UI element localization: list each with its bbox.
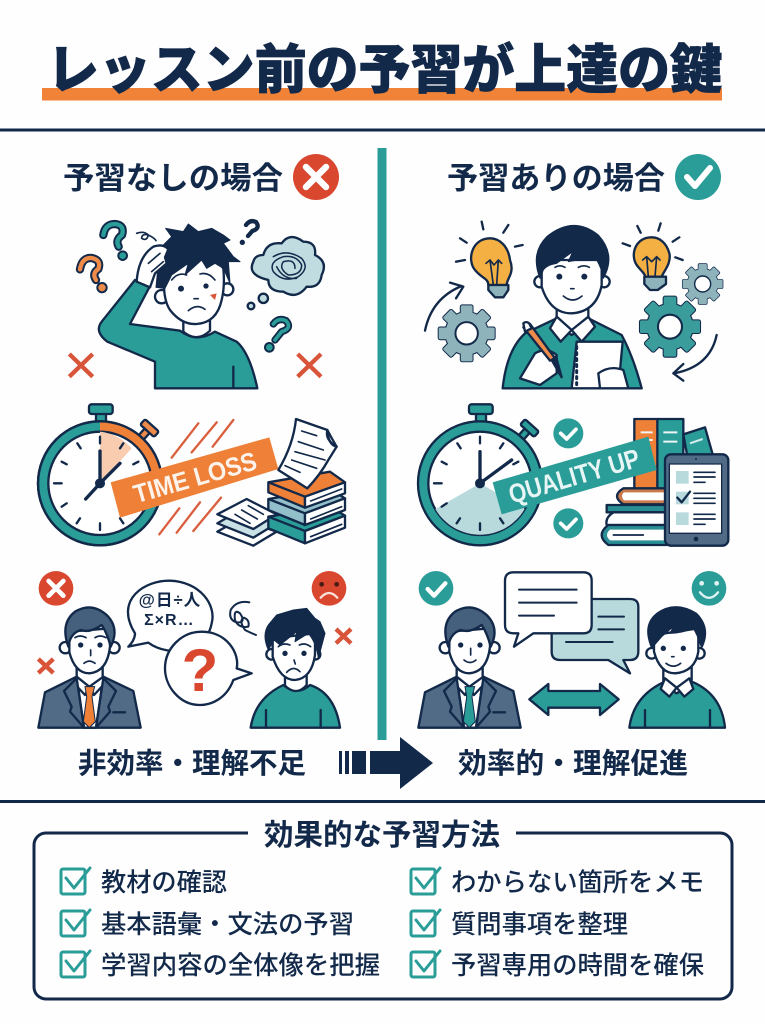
title: レッスン前の予習が上達の鍵: [47, 40, 722, 100]
checklist right column: 予習専用の時間を確保: [451, 952, 705, 980]
illustration: quality up stopwatch: [418, 404, 728, 546]
icon: small crosses: [38, 629, 351, 673]
icon: book stack: [268, 472, 345, 543]
icon: books: [602, 419, 713, 545]
stopwatch: [38, 404, 162, 545]
student figure: [629, 607, 725, 728]
speech bubble: question: ?: [182, 637, 218, 704]
illustration: confused student: [69, 221, 324, 388]
speech bubble: jargon: Σ×R…: [144, 612, 195, 629]
heading: with preparation: [447, 154, 721, 200]
speech bubble: back: [552, 599, 638, 673]
icon: gears: [439, 264, 723, 361]
panel: effective preparation methods: [34, 819, 732, 999]
illustration: time loss stopwatch: [38, 404, 345, 546]
student figure: [251, 608, 340, 728]
arrow: upward cycle: [425, 283, 463, 331]
student figure: [503, 225, 642, 388]
checklist left column: 教材の確認: [101, 869, 227, 897]
icon: right lightbulb: [623, 223, 683, 290]
arrow: downward cycle: [673, 335, 717, 381]
icon: red crosses: [69, 354, 321, 377]
checklist right column: 質問事項を整理: [451, 911, 628, 939]
icon: swirl: [230, 602, 256, 635]
speech bubble: front: [505, 572, 592, 647]
icon: red cross badge: [39, 571, 73, 606]
checklist left column: [61, 868, 380, 980]
checklist right column: わからない箇所をメモ: [451, 869, 704, 897]
teacher figure: [418, 607, 521, 728]
icon: tablet checklist: [665, 454, 728, 546]
icon: speed lines: [159, 420, 233, 534]
student figure: [99, 224, 257, 388]
result label: efficient: 効率的・理解促進: [458, 748, 688, 780]
icon: check badge: [419, 571, 453, 606]
result label: inefficient: 非効率・理解不足: [78, 748, 306, 780]
illustration: prepared student: [425, 222, 723, 388]
illustration: good communication: [418, 571, 726, 728]
speech bubble: question: [165, 632, 252, 705]
arrow: two way: [529, 684, 619, 715]
teacher figure: [38, 607, 141, 728]
banner: time loss: TIME LOSS: [130, 446, 260, 509]
icon: question marks: [80, 221, 289, 352]
heading: without preparation: 予習なしの場合: [63, 161, 283, 196]
icon: smile badge: [692, 571, 726, 606]
icon: sad face badge: [312, 571, 346, 606]
arrow: progress: [339, 737, 433, 789]
checklist left column: 基本語彙・文法の予習: [101, 911, 354, 939]
heading: without preparation: [63, 154, 339, 200]
icon: check badges: [553, 418, 583, 538]
heading: with preparation: 予習ありの場合: [447, 161, 665, 196]
icon: curled document: [278, 419, 337, 488]
icon: thought cloud: [248, 237, 324, 309]
speech bubble: jargon: [128, 581, 213, 651]
icon: scribble: [137, 232, 156, 241]
stopwatch: [418, 404, 542, 545]
illustration: miscommunication: [38, 571, 351, 728]
panel heading: 効果的な予習方法: [264, 819, 500, 852]
icon: left lightbulb: [456, 222, 523, 297]
banner: quality up: QUALITY UP: [505, 443, 643, 510]
speech bubble: jargon: @日÷人: [139, 591, 201, 610]
checklist left column: 学習内容の全体像を把握: [101, 952, 380, 980]
center divider: [378, 148, 386, 740]
icon: loose papers: [217, 499, 277, 546]
checklist right column: [411, 868, 705, 980]
